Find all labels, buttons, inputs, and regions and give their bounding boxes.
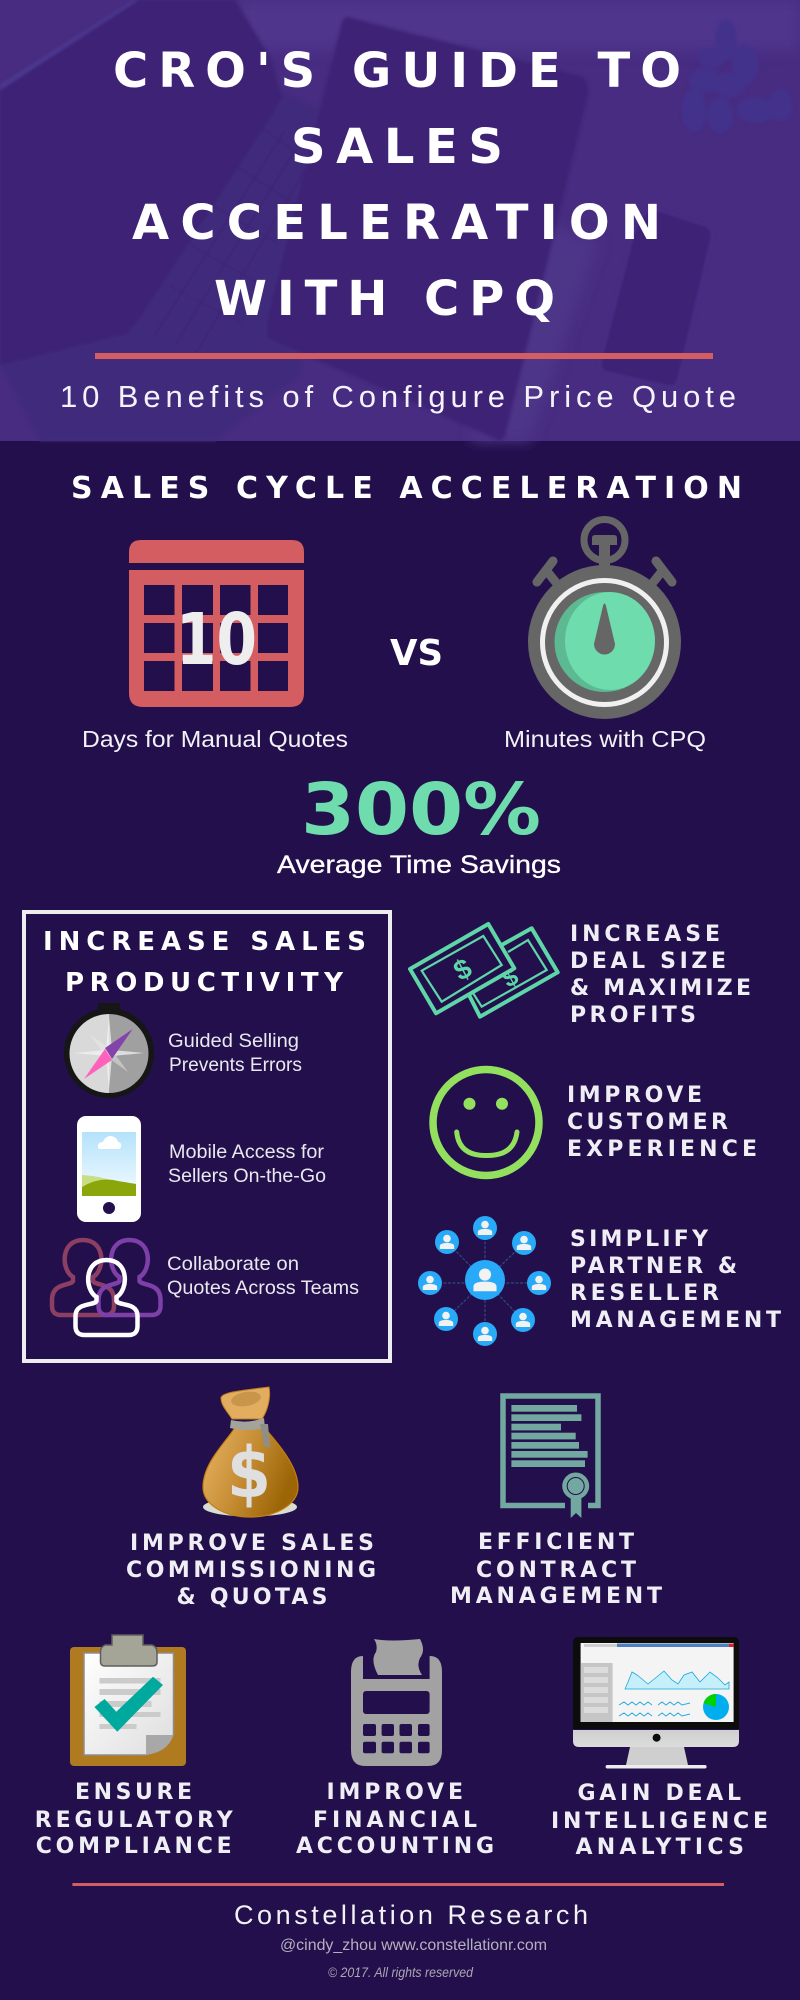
text: contract management: EFFICIENT (478, 1530, 634, 1555)
text: customer experience: IMPROVE (567, 1083, 702, 1108)
icon: money bag (203, 1387, 298, 1517)
text: customer experience: CUSTOMER (567, 1110, 728, 1135)
text: sales commissioning: & QUOTAS (176, 1585, 328, 1610)
panel: partner management (418, 1216, 781, 1346)
text: contract management: MANAGEMENT (450, 1584, 662, 1609)
text: increase deal size: DEAL SIZE (570, 949, 726, 974)
icon: network (418, 1216, 551, 1346)
subtitle: 10 Benefits of Configure Price Quote (60, 379, 736, 414)
text: sales commissioning: IMPROVE SALES (130, 1531, 374, 1556)
text: increase deal size: INCREASE (570, 922, 720, 947)
stat: 300%: 300% (301, 768, 541, 851)
text: financial accounting: ACCOUNTING (296, 1834, 494, 1859)
footer (72, 1883, 724, 1980)
plant (682, 20, 792, 133)
label: days: Days for Manual Quotes (82, 726, 348, 752)
heading (43, 927, 366, 998)
text: partner management: RESELLER (570, 1281, 719, 1306)
organisation name: Constellation Research (234, 1900, 588, 1930)
panel: sales cycle acceleration (71, 471, 742, 879)
panel: deal intelligence (551, 1637, 768, 1860)
contact line: @cindy_zhou www.constellationr.com (280, 1937, 547, 1954)
text: financial accounting: IMPROVE (326, 1780, 463, 1805)
text: deal intelligence (551, 1781, 768, 1860)
text: sales commissioning: COMMISSIONING (126, 1558, 376, 1583)
panel: customer experience (433, 1070, 757, 1176)
title: CRO'S GUIDE TO (113, 43, 681, 99)
title: ACCELERATION (132, 195, 661, 251)
text: collaborate: Quotes Across Teams (167, 1277, 359, 1299)
icon: money bills (410, 924, 558, 1017)
text: deal intelligence: INTELLIGENCE (551, 1809, 768, 1834)
heading: PRODUCTIVITY (65, 968, 344, 998)
copyright: © 2017. All rights reserved (328, 1965, 473, 1980)
icon: clipboard (70, 1635, 186, 1766)
icon: stopwatch (528, 520, 681, 719)
icon: money bag: $ (227, 1432, 271, 1514)
icon: money bills: $ (448, 952, 477, 987)
icon: money bills: $ (498, 962, 523, 994)
text: increase deal size: & MAXIMIZE (570, 976, 751, 1001)
laptop screen (0, 0, 282, 365)
vs label: VS (390, 633, 443, 674)
icon: smiley (433, 1070, 539, 1176)
title: SALES (291, 119, 503, 175)
label: minutes: Minutes with CPQ (504, 726, 706, 752)
heading: INCREASE SALES (43, 927, 366, 957)
text: financial accounting: FINANCIAL (313, 1808, 477, 1833)
icon: calendar (129, 540, 304, 707)
laptop base (0, 90, 322, 441)
panel: increase deal size (410, 922, 751, 1028)
text: increase deal size: PROFITS (570, 1003, 696, 1028)
icon: compass (64, 1003, 154, 1098)
title: WITH CPQ (214, 271, 555, 327)
panel: header (0, 0, 800, 441)
text: financial accounting (296, 1780, 494, 1859)
icon: phone (77, 1116, 141, 1222)
text: deal intelligence: GAIN DEAL (578, 1781, 741, 1806)
icon: monitor with dashboard (573, 1637, 739, 1768)
panel: regulatory compliance (35, 1635, 234, 1859)
text: partner management (570, 1227, 781, 1333)
keyboard keys (135, 110, 312, 355)
text: regulatory compliance (35, 1780, 234, 1859)
panel: financial accounting (296, 1639, 494, 1859)
text: increase deal size (570, 922, 751, 1028)
label: average time savings: Average Time Savings (277, 851, 561, 879)
text: guided selling: Guided Selling (168, 1030, 299, 1052)
panel: sales commissioning (126, 1387, 376, 1610)
text: mobile access: Mobile Access for (169, 1141, 325, 1163)
text: partner management: SIMPLIFY (570, 1227, 709, 1252)
icon: calculator (351, 1639, 442, 1766)
text: guided selling (168, 1030, 302, 1076)
text: contract management: CONTRACT (476, 1558, 636, 1583)
text: mobile access: Sellers On-the-Go (168, 1165, 326, 1187)
text: collaborate: Collaborate on (167, 1253, 299, 1275)
text: regulatory compliance: COMPLIANCE (36, 1834, 232, 1859)
tablet (267, 17, 588, 441)
text: sales commissioning (126, 1531, 376, 1610)
text: partner management: PARTNER & (570, 1254, 737, 1279)
icon: contract (503, 1396, 598, 1518)
heading: SALES CYCLE ACCELERATION (71, 471, 742, 506)
panel: increase sales productivity (24, 912, 390, 1361)
text: contract management (450, 1530, 662, 1609)
text: regulatory compliance: REGULATORY (35, 1808, 234, 1833)
phone (601, 211, 711, 386)
header photo background (0, 0, 800, 441)
panel: contract management (450, 1396, 662, 1609)
text: collaborate (167, 1253, 359, 1299)
text: guided selling: Prevents Errors (169, 1054, 302, 1076)
text: customer experience: EXPERIENCE (567, 1137, 757, 1162)
text: customer experience (567, 1083, 757, 1162)
text: regulatory compliance: ENSURE (75, 1780, 192, 1805)
text: mobile access (168, 1141, 326, 1187)
icon: calendar: 10 (176, 598, 257, 681)
text: deal intelligence: ANALYTICS (576, 1835, 744, 1860)
title (113, 43, 681, 327)
text: partner management: MANAGEMENT (570, 1308, 781, 1333)
icon: team (52, 1240, 160, 1335)
